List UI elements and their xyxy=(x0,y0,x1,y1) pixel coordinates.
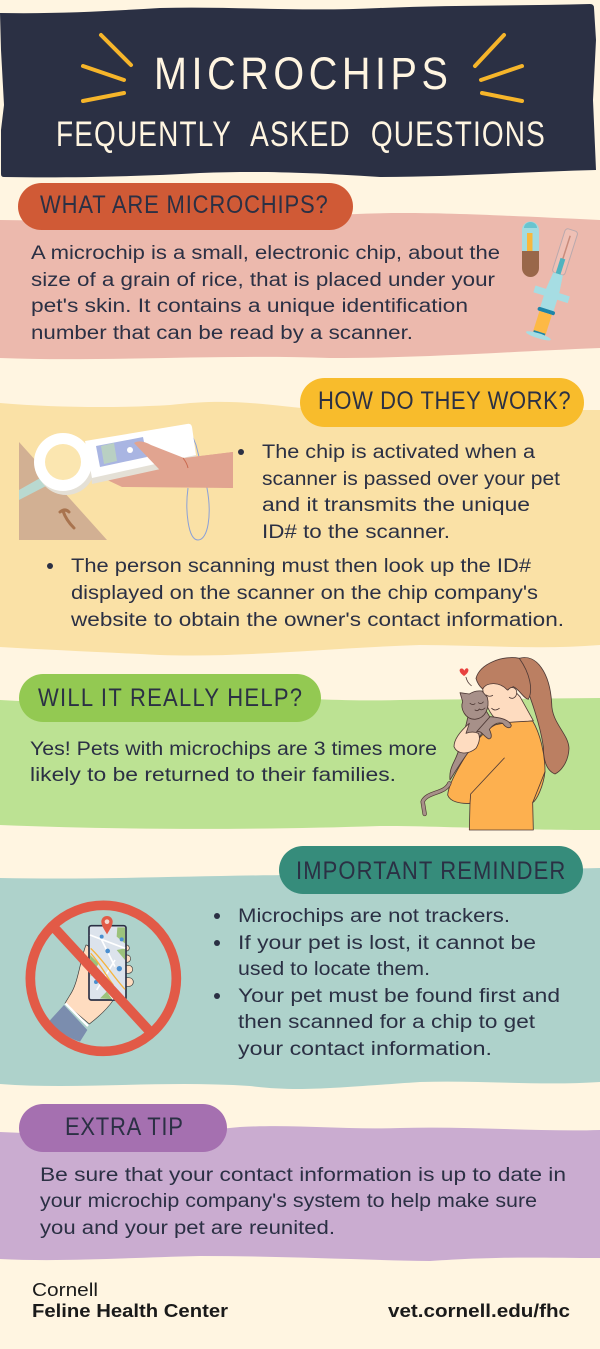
bullet list: Your pet must be found first and xyxy=(238,986,560,1007)
body text: pet's skin. It contains a unique identification xyxy=(31,296,468,317)
heart xyxy=(460,668,468,676)
cat front paw on shoulder xyxy=(477,717,511,739)
bullet list: scanner activation: The chip is activated when a xyxy=(262,442,535,463)
phone xyxy=(89,926,126,1000)
bullet list: scanner activation: scanner is passed over your pet xyxy=(262,469,561,490)
bullet list: scanner activation xyxy=(238,442,561,543)
sleeve xyxy=(49,1005,87,1042)
title: MICROCHIPS xyxy=(154,49,448,99)
pill heading xyxy=(18,183,353,230)
cat head xyxy=(460,691,488,719)
icon: no tracking phone xyxy=(30,905,176,1051)
pill heading: WHAT ARE MICROCHIPS? xyxy=(40,191,328,218)
bullet list: look up ID: displayed on the scanner on the chip company's xyxy=(71,583,538,604)
body text: Yes! Pets with microchips are 3 times more xyxy=(30,739,437,760)
panel: important reminder xyxy=(0,846,600,1089)
panel: what are microchips xyxy=(0,183,600,359)
bullet list: used to locate them. xyxy=(238,959,430,980)
footer logo text: Cornell xyxy=(32,1280,98,1300)
pill heading: EXTRA TIP xyxy=(65,1113,183,1140)
subtitle: FEQUENTLY ASKED QUESTIONS xyxy=(56,114,545,154)
panel: how they work xyxy=(0,378,600,656)
face and neck xyxy=(483,680,533,723)
body text: A microchip is a small, electronic chip, about the xyxy=(31,243,500,264)
body text: Be sure that your contact information is up to date in xyxy=(40,1165,566,1186)
body text xyxy=(40,1165,566,1239)
body text xyxy=(30,739,437,786)
panel: will it really help xyxy=(0,658,600,830)
fingers xyxy=(123,945,133,986)
header banner xyxy=(0,4,596,177)
pill heading xyxy=(279,846,583,894)
hand xyxy=(65,945,113,1024)
hand xyxy=(454,723,479,753)
prohibition sign xyxy=(30,905,176,1051)
pill heading: HOW DO THEY WORK? xyxy=(318,387,571,414)
footer logo text xyxy=(32,1280,228,1321)
bullet list: scanner activation: and it transmits the unique xyxy=(262,495,530,516)
body text: you and your pet are reunited. xyxy=(40,1218,335,1239)
footer url: vet.cornell.edu/fhc xyxy=(388,1301,570,1321)
body text: likely to be returned to their families. xyxy=(30,765,396,786)
ponytail xyxy=(519,658,569,774)
bullet list xyxy=(214,906,560,1060)
cat tail xyxy=(423,783,449,814)
body text: your microchip company's system to help make sure xyxy=(40,1191,537,1212)
bullet list: then scanned for a chip to get xyxy=(238,1012,536,1033)
bullet list: If your pet is lost, it cannot be xyxy=(238,933,536,954)
pill heading: IMPORTANT REMINDER xyxy=(296,857,565,884)
bullet list: your contact information. xyxy=(238,1039,492,1060)
panel: extra tip xyxy=(0,1104,600,1261)
bullet list: look up ID: website to obtain the owner's contact information. xyxy=(70,610,564,631)
sweater xyxy=(448,721,545,830)
pill heading xyxy=(19,1104,227,1152)
cat body xyxy=(450,712,492,780)
decorative rays xyxy=(83,35,522,101)
bullet list: Microchips are not trackers. xyxy=(238,906,510,927)
icon: capsule xyxy=(522,222,539,277)
bullet list: look up ID xyxy=(47,556,564,631)
footer logo text: Feline Health Center xyxy=(32,1301,228,1321)
pill heading xyxy=(300,378,584,427)
body text: number that can be read by a scanner. xyxy=(31,323,413,344)
illustration: scanner xyxy=(19,424,233,540)
illustration: woman hugging cat xyxy=(423,658,569,830)
pill heading xyxy=(19,674,321,722)
body text xyxy=(31,243,500,344)
pill heading: WILL IT REALLY HELP? xyxy=(38,684,302,711)
icon: syringe xyxy=(521,225,589,344)
ear xyxy=(508,688,517,698)
body text: size of a grain of rice, that is placed under your xyxy=(31,270,496,291)
bullet list: look up ID: The person scanning must then look up the ID# xyxy=(71,556,531,577)
bullet list: scanner activation: ID# to the scanner. xyxy=(262,522,450,543)
hair xyxy=(476,658,531,699)
